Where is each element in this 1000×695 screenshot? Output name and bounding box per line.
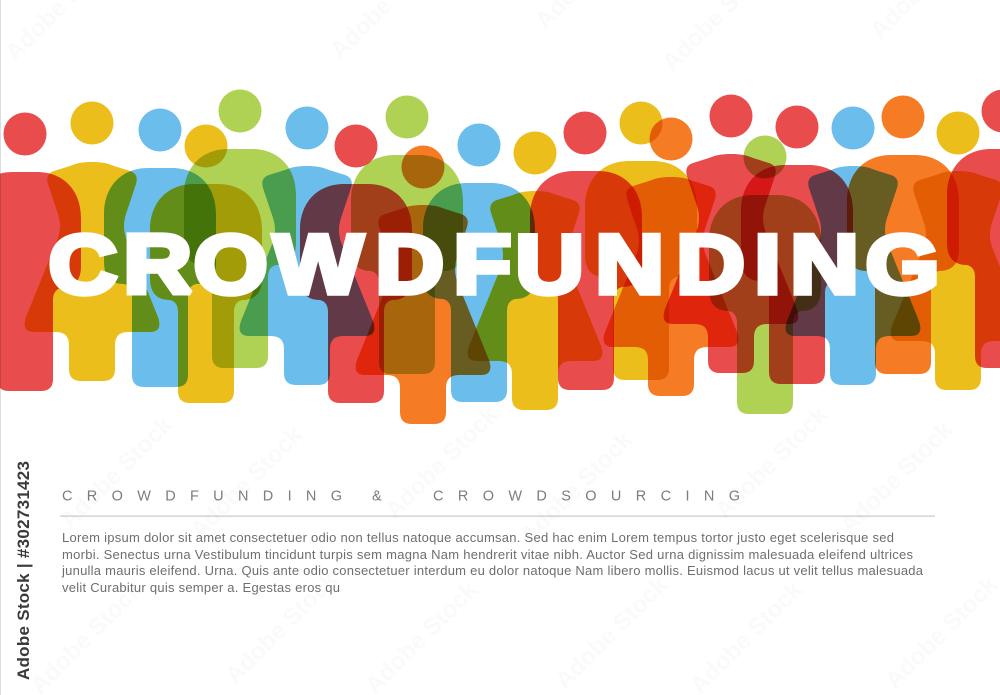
body text: velit Curabitur quis semper a. Egestas eros qu [62, 580, 340, 595]
watermarks: Adobe Stock [515, 426, 638, 549]
person: red man 3 [530, 112, 642, 390]
subtitle: CROWDSOURCING [433, 488, 740, 504]
subtitle: CROWDFUNDING [62, 488, 342, 504]
person: red man 1 [0, 112, 81, 391]
watermarks: Adobe Stock [185, 421, 308, 544]
person: green man 3 [709, 136, 821, 414]
person: yellow woman 3 [891, 112, 1000, 390]
person: blue man 1 [104, 108, 216, 387]
watermarks: Adobe Stock [710, 401, 833, 524]
title: CROWDFUNDING [49, 217, 939, 311]
divider line [60, 516, 935, 517]
watermarks: Adobe Stock [835, 416, 958, 539]
person: blue woman 2 [786, 106, 920, 385]
person: yellow man 1 [150, 124, 262, 403]
person: red man 5 [947, 90, 1000, 368]
body text [61, 530, 924, 595]
person: yellow woman 1 [25, 102, 159, 381]
person: red man 2 [300, 124, 412, 403]
person: green man 1 [184, 90, 296, 368]
body text: morbi. Senectus urna Vestibulum tincidunt turpis sem magna Nam hendrerit vitae nibh. Auctor Sed urna dignissim malesuada eleifend ultrices [62, 547, 914, 562]
subtitle [62, 488, 740, 504]
watermarks: Adobe Stock [880, 571, 1000, 694]
watermarks: Adobe Stock [220, 566, 343, 689]
body text: Lorem ipsum dolor sit amet consectetuer odio non tellus natoque accumsan. Sed hac enim Lorem tempus tortor justo eget scelerisque sed [62, 530, 894, 545]
person: yellow woman 2 [468, 132, 602, 410]
watermarks: Adobe Stock [380, 401, 503, 524]
watermarks: Adobe Stock [550, 571, 673, 694]
person: red woman [664, 94, 798, 373]
stock id vertical caption: Adobe Stock | #302731423 [14, 461, 33, 680]
body text: junulla mauris eleifend. Urna. Quis ante odio consectetuer interdum eu dolor natoque Nam libero mollis. Euismod lacus ut velit tellus malesuada [61, 563, 924, 578]
person: blue man 2 [423, 124, 535, 402]
person: blue woman 1 [240, 106, 374, 385]
person: red man 4 [741, 106, 853, 384]
person: yellow man 2 [585, 102, 697, 380]
person: orange woman 1 [356, 146, 490, 424]
watermarks: Adobe Stock [55, 411, 178, 534]
person: green man 2 [351, 96, 463, 374]
crowd of people illustration [0, 90, 1000, 424]
subtitle: & [372, 488, 382, 504]
person: orange woman 2 [604, 118, 738, 396]
person: orange man [847, 96, 959, 374]
